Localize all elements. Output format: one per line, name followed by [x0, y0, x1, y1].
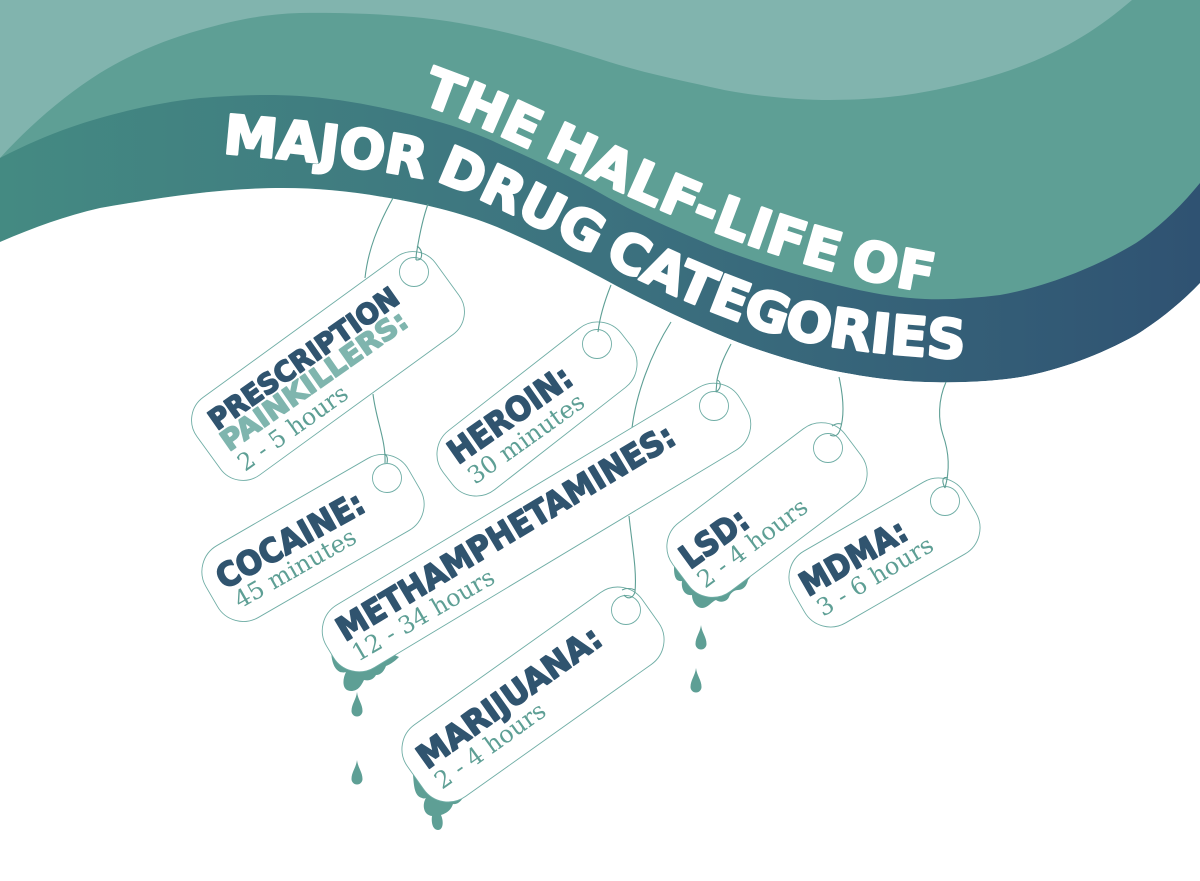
drip: methamphetamines blob	[331, 640, 399, 691]
tag: cocaine	[191, 394, 435, 632]
label: cocaine: COCAINE:	[209, 483, 371, 597]
falling drop 4	[690, 668, 702, 692]
tag: prescription painkillers	[180, 204, 476, 492]
value: 2 - 5 hours: 2 - 5 hours	[232, 379, 354, 477]
drip: lsd blob	[674, 550, 756, 608]
label: prescription: PRESCRIPTION	[202, 281, 405, 437]
value: 2 - 4 hours: 2 - 4 hours	[692, 493, 813, 594]
wave: dark gradient band	[0, 95, 1200, 382]
falling drop 1	[352, 692, 362, 716]
value: 2 - 4 hours: 2 - 4 hours	[429, 696, 551, 795]
value: 45 minutes: 45 minutes	[229, 523, 361, 614]
tag: mdma	[778, 382, 991, 638]
tag: marijuana	[390, 516, 676, 814]
falling drop 2	[352, 760, 362, 784]
value: 30 minutes: 30 minutes	[462, 388, 590, 490]
value: 12 - 34 hours: 12 - 34 hours	[347, 563, 500, 667]
value: 3 - 6 hours: 3 - 6 hours	[812, 531, 938, 622]
tag: lsd	[655, 377, 879, 609]
hanging strings behind tags	[365, 198, 671, 428]
label: mdma: MDMA:	[792, 511, 914, 604]
tag: methamphetamines	[311, 344, 762, 683]
label: marijuana: MARIJUANA:	[409, 618, 609, 777]
tag: heroin	[425, 285, 649, 508]
white page below the wave	[0, 188, 1200, 881]
label: lsd: LSD:	[672, 500, 756, 576]
wave: light teal crest	[0, 0, 1132, 158]
label: methamphetamines: METHAMPHETAMINES:	[329, 416, 682, 649]
label: painkillers: PAINKILLERS:	[214, 304, 414, 458]
label: heroin: HEROIN:	[440, 358, 580, 472]
title	[226, 64, 963, 360]
title line 1: THE HALF-LIFE OF	[430, 64, 935, 290]
falling drop 3	[696, 625, 706, 650]
title line 2: MAJOR DRUG CATEGORIES	[226, 113, 963, 360]
wave: medium teal background	[0, 0, 1200, 300]
drip: marijuana blob	[413, 770, 481, 830]
